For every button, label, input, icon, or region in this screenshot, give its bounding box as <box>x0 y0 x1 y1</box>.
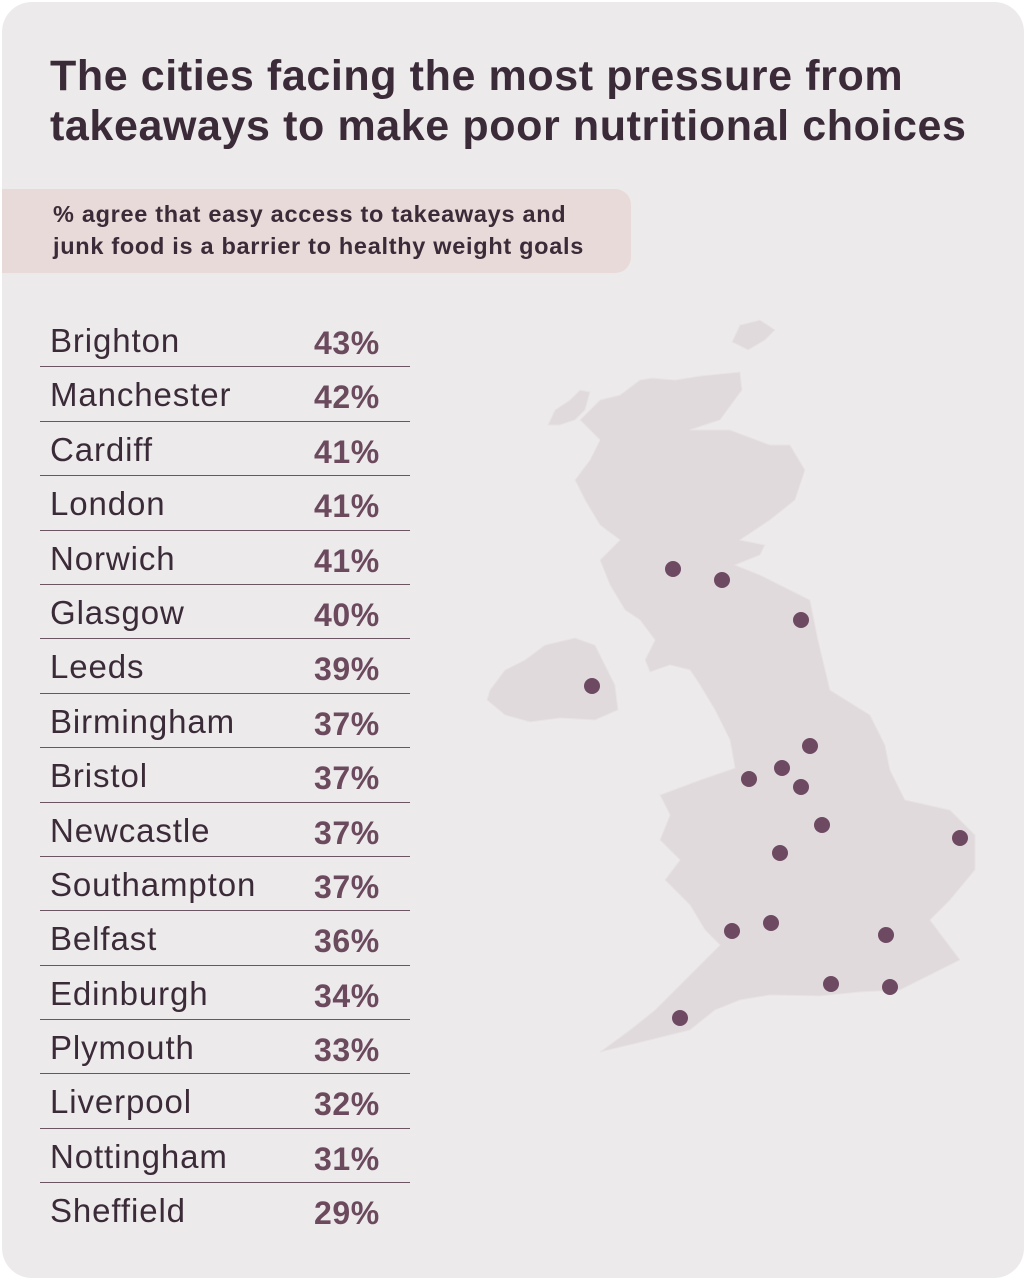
map: islands <box>732 320 775 350</box>
map: city dots <box>584 561 968 1026</box>
title: takeaways to make poor nutritional choices <box>50 102 967 150</box>
table: city rankings: 37% <box>314 760 380 796</box>
table: city rankings: Norwich <box>50 540 176 577</box>
table: city rankings: 36% <box>314 923 380 959</box>
table: city rankings: 39% <box>314 651 380 687</box>
subtitle box: junk food is a barrier to healthy weight goals <box>53 233 584 259</box>
table: city rankings: Manchester <box>50 376 231 413</box>
table: city rankings: 31% <box>314 1141 380 1177</box>
table: city rankings: 40% <box>314 597 380 633</box>
map: northern ireland <box>487 638 618 722</box>
table: city rankings: 37% <box>314 869 380 905</box>
table: city rankings: Bristol <box>50 757 148 794</box>
table: city rankings: 41% <box>314 488 380 524</box>
table: city rankings: London <box>50 485 166 522</box>
subtitle box <box>2 189 631 273</box>
table: city rankings: 37% <box>314 815 380 851</box>
map: great britain <box>575 372 975 1052</box>
title: The cities facing the most pressure from <box>50 52 903 100</box>
table: city rankings: Leeds <box>50 648 144 685</box>
title <box>50 52 967 150</box>
table: city rankings: 41% <box>314 434 380 470</box>
table: city rankings: 32% <box>314 1086 380 1122</box>
table: city rankings: Cardiff <box>50 431 153 468</box>
table: city rankings: 33% <box>314 1032 380 1068</box>
table: city rankings: Sheffield <box>50 1192 186 1229</box>
table: city rankings: 43% <box>314 325 380 361</box>
table: city rankings: Nottingham <box>50 1138 228 1175</box>
subtitle box: % agree that easy access to takeaways and <box>53 201 566 227</box>
table: city rankings: Glasgow <box>50 594 185 631</box>
table: city rankings: Belfast <box>50 920 157 957</box>
table: city rankings: Newcastle <box>50 812 210 849</box>
table: city rankings: 41% <box>314 543 380 579</box>
table: city rankings: Birmingham <box>50 703 235 740</box>
table: city rankings: Southampton <box>50 866 256 903</box>
table: city rankings: 29% <box>314 1195 380 1231</box>
table: city rankings: Brighton <box>50 322 180 359</box>
table: city rankings: Plymouth <box>50 1029 195 1066</box>
table: city rankings: 34% <box>314 978 380 1014</box>
table: city rankings <box>40 322 410 1231</box>
table: city rankings: Edinburgh <box>50 975 209 1012</box>
table: city rankings: Liverpool <box>50 1083 192 1120</box>
table: city rankings: 37% <box>314 706 380 742</box>
table: city rankings: 42% <box>314 379 380 415</box>
